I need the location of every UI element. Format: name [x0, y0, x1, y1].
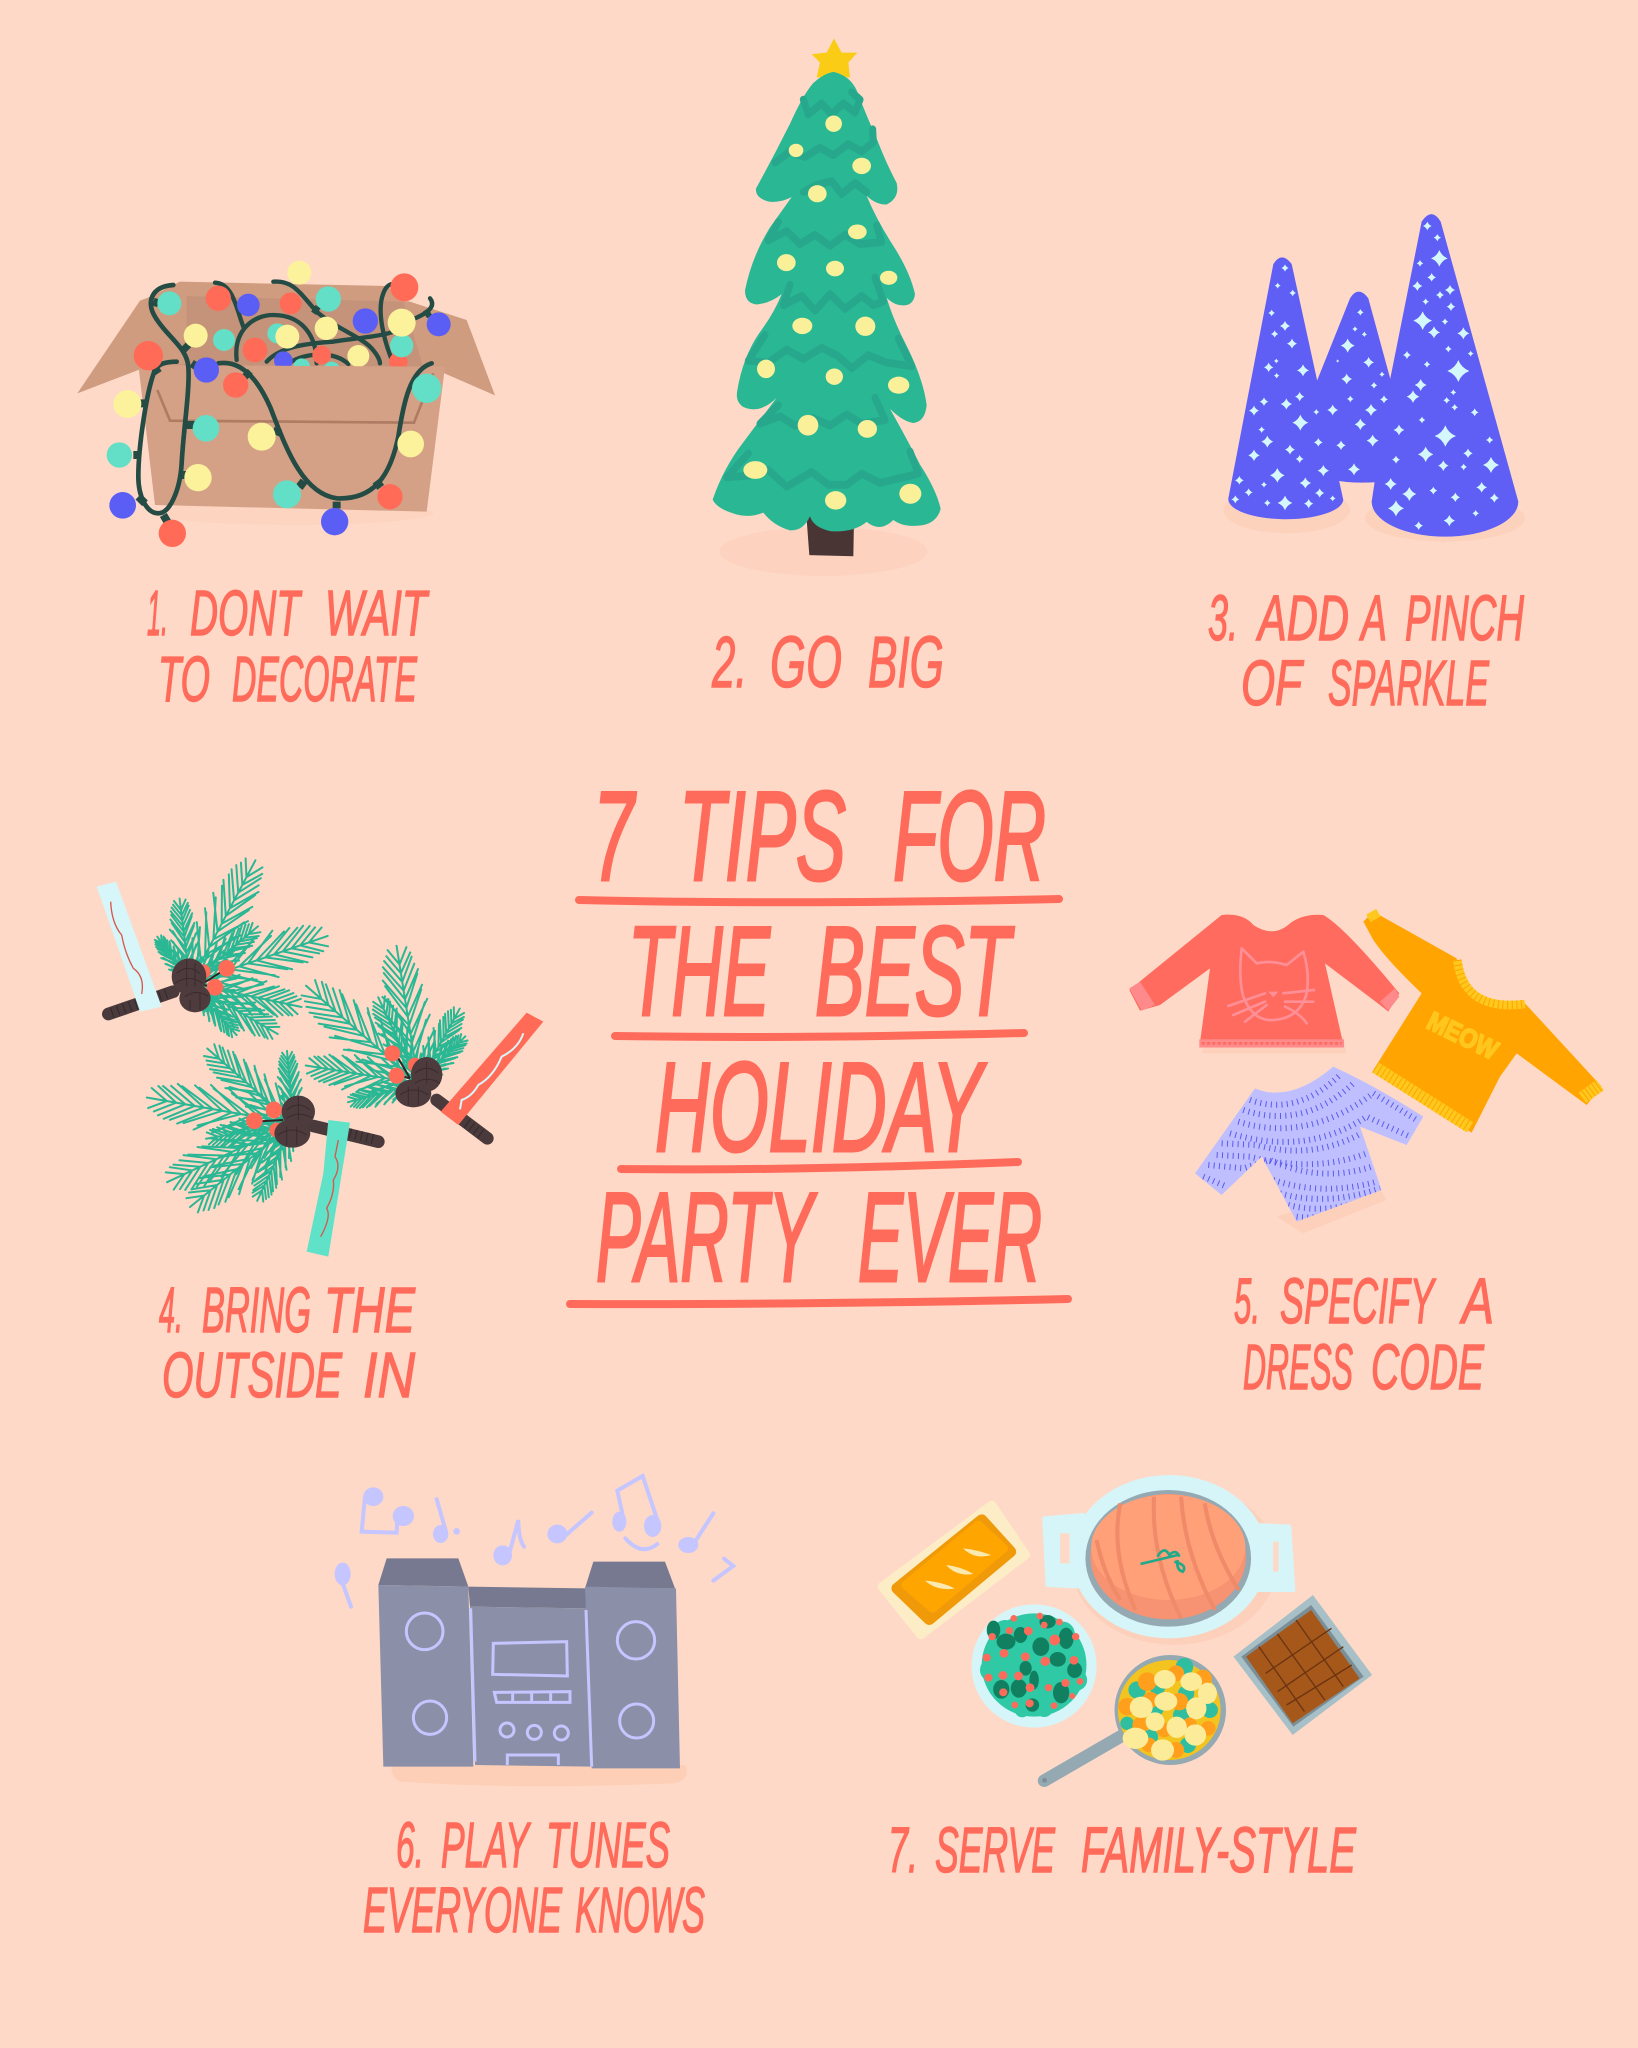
dish: baguette loaf	[882, 1505, 1026, 1635]
label: tip 3: A	[1359, 582, 1387, 654]
label: tip 2: BIG	[868, 623, 944, 703]
icon: box of string lights	[77, 261, 495, 547]
branch: right	[290, 942, 543, 1138]
title: 7	[593, 765, 637, 907]
icon: pine branches with ribbons	[97, 850, 543, 1257]
sweater: lavender knit	[1195, 1067, 1423, 1233]
title: THE	[628, 900, 771, 1042]
label: tip 1: 1.	[147, 577, 168, 649]
dish: green salad	[972, 1604, 1097, 1728]
label: tip 3	[1208, 582, 1524, 719]
label: tip 5: CODE	[1371, 1331, 1485, 1403]
label: tip 3: PINCH	[1405, 582, 1524, 654]
label: tip 3: SPARKLE	[1328, 647, 1490, 719]
label: tip 5: 5.	[1234, 1265, 1260, 1337]
label: tip 7: 7.	[888, 1814, 918, 1886]
label: tip 5: SPECIFY	[1280, 1265, 1436, 1337]
label: tip 7: SERVE	[935, 1814, 1056, 1886]
icon: sparkly party hats	[1223, 214, 1525, 542]
label: tip 3: 3.	[1208, 582, 1238, 654]
label: tip 1	[147, 577, 430, 715]
label: tip 3: OF	[1241, 647, 1305, 719]
sweater: orange meow: MEOW	[1422, 1006, 1504, 1066]
label: tip 6	[363, 1809, 705, 1946]
label: tip 7	[888, 1814, 1357, 1886]
label: tip 6: PLAY	[441, 1809, 531, 1881]
sweater: orange meow	[1363, 912, 1602, 1133]
icon: family-style dishes	[882, 1475, 1372, 1783]
dish: salmon casserole	[1044, 1475, 1293, 1645]
label: tip 7: FAMILY-STYLE	[1081, 1814, 1357, 1886]
label: tip 4: OUTSIDE	[162, 1339, 343, 1411]
title: PARTY	[596, 1166, 817, 1308]
label: tip 6: TUNES	[546, 1809, 670, 1881]
label: tip 1: DONT	[190, 577, 302, 649]
label: tip 3: ADD	[1255, 582, 1349, 654]
label: tip 4: IN	[363, 1339, 416, 1411]
dish: brownie pan	[1233, 1595, 1372, 1735]
label: tip 1: DECORATE	[232, 643, 418, 715]
label: tip 4: THE	[324, 1274, 416, 1346]
label: tip 5: DRESS	[1243, 1331, 1353, 1403]
label: tip 2: GO	[770, 623, 842, 703]
dish: skillet of vegetables	[1042, 1655, 1226, 1783]
branch: lower	[143, 1035, 378, 1257]
icon: three sweaters	[1129, 912, 1602, 1233]
branch: upper left	[97, 850, 335, 1048]
label: tip 5	[1234, 1265, 1494, 1403]
label: tip 4: 4.	[159, 1274, 183, 1346]
sweater: red cat	[1129, 915, 1399, 1053]
label: tip 2: 2.	[711, 623, 747, 703]
label: tip 4	[159, 1274, 416, 1411]
icon: stereo with music notes	[337, 1476, 733, 1786]
label: tip 4: BRING	[202, 1274, 311, 1346]
title	[570, 765, 1068, 1308]
music notes	[337, 1476, 733, 1607]
title: BEST	[815, 900, 1015, 1042]
label: tip 6: 6.	[396, 1809, 424, 1881]
label: tip 5: A	[1459, 1265, 1494, 1337]
title: TIPS	[679, 765, 846, 907]
icon: christmas tree	[713, 39, 941, 576]
title: HOLIDAY	[655, 1036, 987, 1178]
title: EVER	[858, 1166, 1042, 1308]
label: tip 1: WAIT	[325, 577, 430, 649]
label: tip 6: KNOWS	[575, 1874, 705, 1946]
label: tip 6: EVERYONE	[363, 1874, 563, 1946]
title: FOR	[893, 765, 1046, 907]
label: tip 2	[711, 623, 944, 703]
label: tip 1: TO	[158, 643, 210, 715]
